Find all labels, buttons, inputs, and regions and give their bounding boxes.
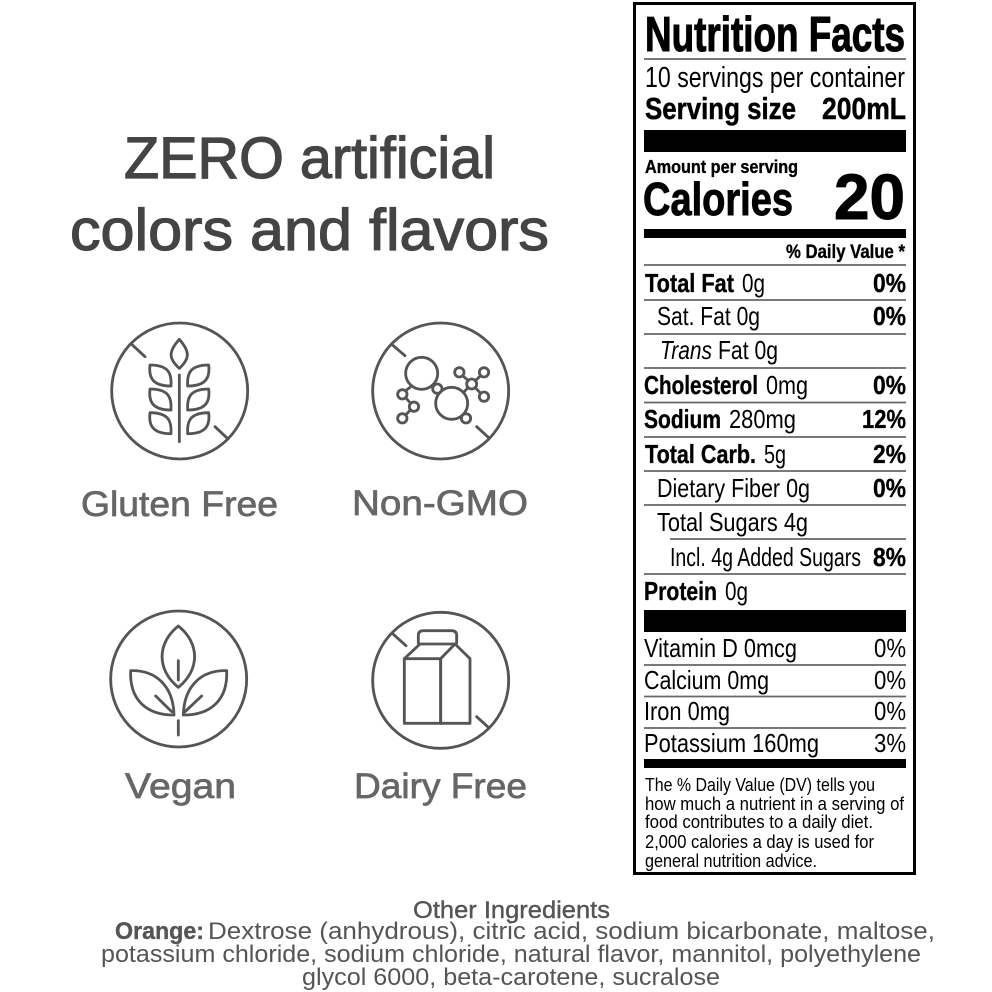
label: vegan: Vegan [125,767,236,806]
footnote: general nutrition advice. [645,850,817,871]
footnote [645,774,905,871]
row: sodium: 12% [862,404,906,434]
other ingredients: Other Ingredients [413,897,610,924]
title: colors and flavors [70,198,549,263]
row: total sugars: Total Sugars 4g [657,507,808,537]
footnote: The % Daily Value (DV) tells you [645,774,875,795]
row: potassium: 3% [874,728,906,758]
row: total fat: 0% [873,268,906,298]
calories: Calories [643,173,793,225]
row: total fat [645,268,906,298]
row: protein: Protein [644,576,717,606]
row: potassium: Potassium 160mg [644,728,819,758]
daily value header: % Daily Value * [786,242,906,263]
other ingredients: glycol 6000, beta-carotene, sucralose [302,964,720,991]
other ingredients: potassium chloride, sodium chloride, natural flavor, mannitol, polyethylene [101,941,921,968]
row: sodium: Sodium [644,404,721,434]
row: total carbohydrate: Total Carb. [645,439,756,469]
footnote: food contributes to a daily diet. [645,811,873,832]
label: non-GMO: Non-GMO [352,484,528,523]
title [70,126,549,263]
row: calcium: Calcium 0mg [644,665,769,695]
row: vitamin d: 0% [874,633,906,663]
calories: 20 [834,161,905,233]
row: iron: Iron 0mg [644,696,730,726]
title: ZERO artificial [124,126,495,191]
row: saturated fat: 0% [873,301,906,331]
row: sodium [644,404,906,434]
serving size: Serving size [645,91,796,126]
row: vitamin d [644,633,906,663]
row: cholesterol [644,370,906,400]
amount per serving: Amount per serving [645,157,798,177]
serving size: 200mL [822,91,906,126]
row: trans fat [660,335,778,365]
label: dairy free: Dairy Free [354,767,527,806]
row: total fat: Total Fat [645,268,734,298]
row: dietary fiber: 0% [873,473,906,503]
row: calcium: 0% [874,665,906,695]
panel: nutrition facts [634,4,914,874]
row: trans fat: Trans [660,335,712,365]
other ingredients [101,897,935,991]
row: sodium: 280mg [729,404,796,434]
footnote: how much a nutrient in a serving of [645,793,905,814]
icon: dairy free carton [373,612,509,748]
row: dietary fiber: Dietary Fiber 0g [657,473,810,503]
row: iron [644,696,906,726]
row: protein: 0g [725,576,748,606]
row: iron: 0% [874,696,906,726]
row: cholesterol: 0% [873,370,906,400]
row: saturated fat: Sat. Fat 0g [657,301,760,331]
icon: vegan leaves [111,611,247,747]
other ingredients: Orange: [115,918,204,945]
icon: gluten free wheat [112,323,248,459]
row: added sugars: 8% [873,542,906,572]
row: trans fat: Fat 0g [718,335,778,365]
icon: non-GMO molecule [373,323,509,459]
servings per container: 10 servings per container [645,62,905,94]
row: total carbohydrate: 2% [873,439,906,469]
row: total fat: 0g [742,268,765,298]
other ingredients: Dextrose (anhydrous), citric acid, sodium bicarbonate, maltose, [208,918,935,945]
row: cholesterol: 0mg [766,370,808,400]
row: total carbohydrate: 5g [764,439,786,469]
row: added sugars: Incl. 4g Added Sugars [670,542,861,572]
nutrition heading: Nutrition Facts [645,8,905,62]
row: total carbohydrate [645,439,906,469]
footnote: 2,000 calories a day is used for [645,831,874,852]
row: cholesterol: Cholesterol [644,370,758,400]
row: vitamin d: Vitamin D 0mcg [644,633,797,663]
calories [643,161,905,233]
label: gluten free: Gluten Free [81,485,278,524]
row: saturated fat [657,301,906,331]
panel border [634,4,914,874]
serving size [645,91,906,126]
row: calcium [644,665,906,695]
